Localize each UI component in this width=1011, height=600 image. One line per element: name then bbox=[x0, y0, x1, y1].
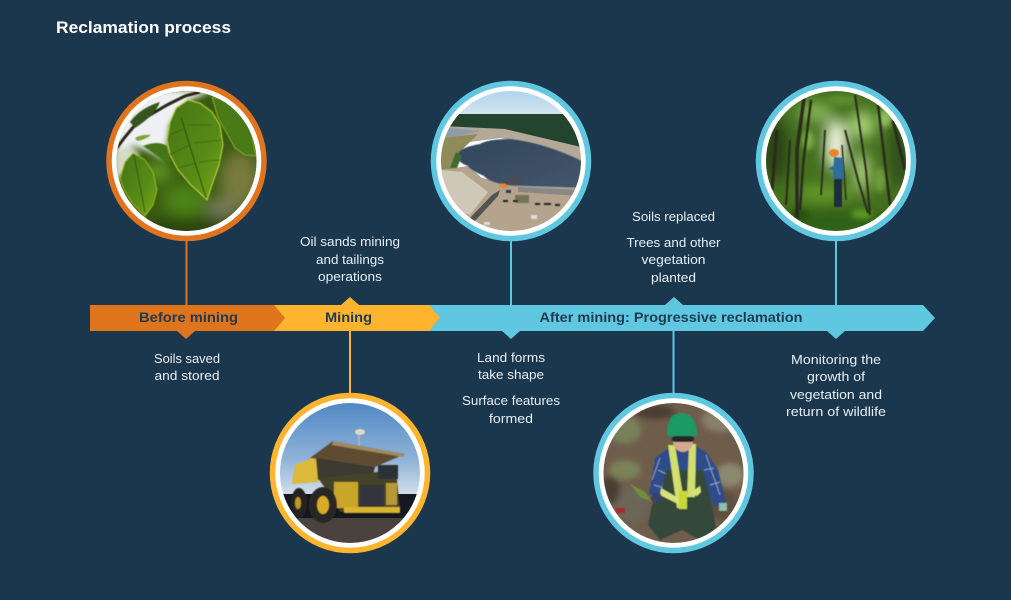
text: soils replaced: Trees and other bbox=[626, 235, 721, 250]
photo: forest monitoring bbox=[758, 84, 914, 238]
connector: before mining bbox=[186, 240, 188, 306]
text: oil sands mining: Oil sands mining bbox=[300, 234, 400, 249]
photo: haul truck bbox=[272, 396, 428, 550]
text: monitoring bbox=[786, 352, 886, 419]
seedling bbox=[630, 484, 653, 502]
text: soils replaced: planted bbox=[651, 270, 696, 285]
photo: reclaimed lake bbox=[434, 84, 588, 238]
harness bbox=[668, 445, 685, 508]
text: soils replaced: Soils replaced bbox=[632, 209, 715, 224]
face bbox=[672, 436, 694, 453]
person bbox=[834, 177, 842, 207]
connector: planting bbox=[672, 330, 674, 394]
text: soils saved: and stored bbox=[154, 368, 220, 383]
truck body bbox=[318, 470, 400, 512]
text: oil sands mining: operations bbox=[318, 269, 383, 284]
text: land forms bbox=[462, 350, 561, 426]
dump body bbox=[292, 458, 325, 484]
arrow: mining bbox=[274, 297, 440, 331]
text: monitoring: return of wildlife bbox=[786, 404, 886, 419]
text: oil sands mining: and tailings bbox=[316, 252, 385, 267]
arrow: after mining: After mining: Progressive reclamation bbox=[540, 309, 802, 325]
text: monitoring: growth of bbox=[807, 369, 865, 384]
timeline bar bbox=[90, 297, 935, 339]
connector: mining bbox=[349, 330, 351, 394]
lamp bbox=[358, 432, 360, 447]
arrow: before mining: Before mining bbox=[139, 309, 238, 325]
text: land forms: take shape bbox=[478, 367, 544, 382]
arrow: before mining bbox=[90, 305, 285, 339]
text: soils replaced bbox=[626, 209, 721, 285]
connector: land forms bbox=[510, 240, 512, 306]
text: soils saved: Soils saved bbox=[154, 351, 220, 366]
text: monitoring: Monitoring the bbox=[791, 352, 881, 367]
title: Reclamation process bbox=[56, 18, 231, 37]
text: land forms: Surface features bbox=[462, 393, 561, 408]
text: soils replaced: vegetation bbox=[642, 252, 706, 267]
text: soils saved bbox=[154, 351, 220, 383]
helmet bbox=[667, 413, 698, 436]
arrow: mining: Mining bbox=[325, 309, 372, 325]
branch bbox=[116, 92, 200, 149]
text: land forms: Land forms bbox=[477, 350, 546, 365]
text: oil sands mining bbox=[300, 234, 400, 284]
shirt bbox=[649, 446, 726, 507]
text: land forms: formed bbox=[489, 411, 533, 426]
text: monitoring: vegetation and bbox=[790, 387, 882, 402]
photo: leaves bbox=[109, 84, 264, 238]
wheels bbox=[291, 488, 307, 518]
arrow: after mining bbox=[429, 297, 935, 339]
photo: planter bbox=[596, 396, 751, 550]
connector: monitoring bbox=[835, 240, 837, 306]
glove bbox=[719, 503, 727, 511]
overalls bbox=[648, 470, 716, 540]
